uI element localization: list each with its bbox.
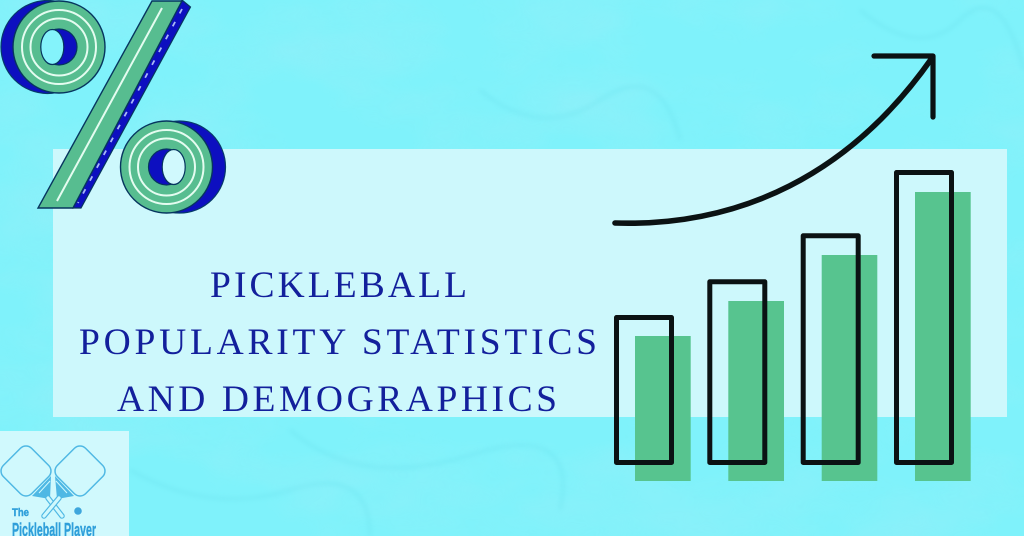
black outlined bars: [616, 172, 952, 462]
title: AND DEMOGRAPHICS: [117, 379, 557, 420]
lower ring of percent sign: [120, 121, 226, 213]
slash of percent sign: [38, 0, 190, 208]
logo text: [12, 507, 96, 536]
icon: crossed paddles: [0, 443, 108, 516]
title: PICKLEBALL: [210, 265, 467, 306]
arrow: upward growth curve: [615, 56, 933, 223]
icon: ball: [74, 507, 82, 515]
green filled bars: [635, 192, 971, 481]
logo text: The: [12, 507, 29, 519]
panel: translucent title band: [53, 149, 1007, 417]
upper ring of percent sign: [1, 0, 105, 94]
logo: The Pickleball Player: [0, 431, 129, 536]
title: [79, 265, 597, 420]
title: POPULARITY STATISTICS: [79, 322, 597, 363]
bar chart: [616, 172, 971, 481]
icon: percent sign: [1, 0, 226, 213]
